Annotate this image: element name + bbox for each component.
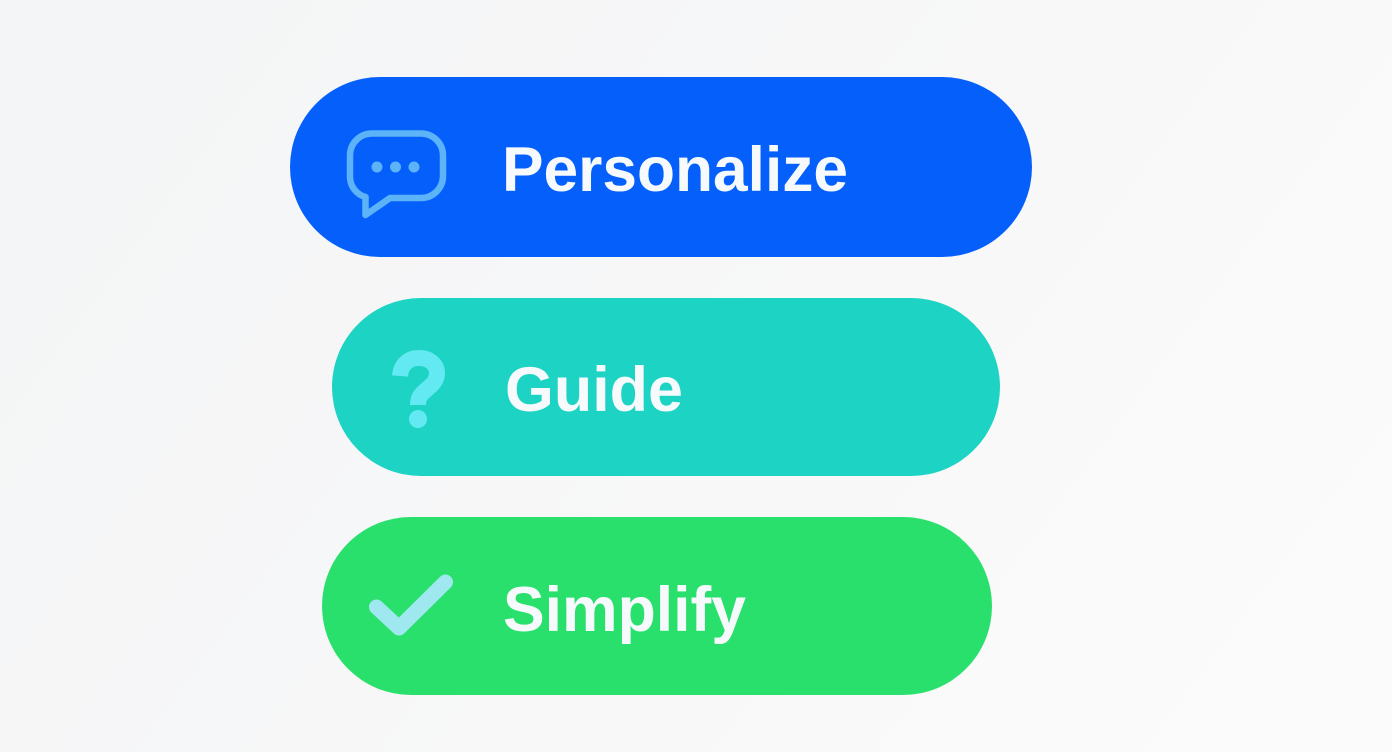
label: Simplify: Simplify xyxy=(503,575,746,645)
label: Guide: Guide xyxy=(505,355,683,425)
label: Personalize: Personalize xyxy=(502,135,848,205)
icon: question mark xyxy=(400,358,437,428)
panel: Simplify pill xyxy=(322,517,992,695)
icon: speech bubble xyxy=(350,134,443,215)
icon: check mark xyxy=(376,582,446,628)
panel: Personalize pill xyxy=(290,77,1032,257)
panel: Guide pill xyxy=(332,298,1000,476)
